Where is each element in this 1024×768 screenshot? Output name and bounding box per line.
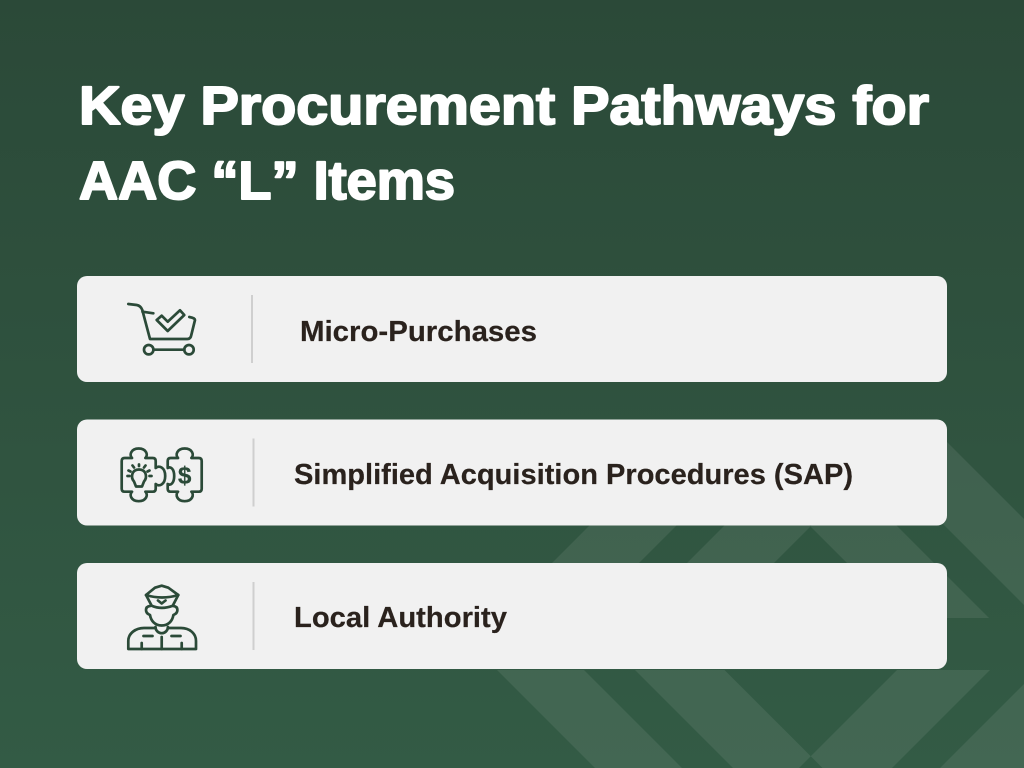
title: AAC “L” Items — [79, 151, 455, 211]
panel: Local Authority — [77, 563, 947, 669]
title — [79, 76, 929, 211]
background chevron pattern — [497, 430, 1024, 768]
icon: puzzle pieces with bulb and dollar — [122, 448, 202, 501]
dollar sign: $ — [178, 462, 192, 490]
icon: shopping cart with check — [128, 304, 195, 354]
panel: Micro-Purchases — [77, 276, 947, 382]
panel: Simplified Acquisition Procedures — [77, 420, 947, 526]
label: Simplified Acquisition Procedures (SAP): Simplified Acquisition Procedures (SAP) — [294, 459, 853, 491]
title: Key Procurement Pathways for — [79, 76, 929, 136]
label: Micro-Purchases: Micro-Purchases — [300, 316, 537, 348]
label: Local Authority: Local Authority — [294, 602, 507, 634]
icon: uniformed officer — [128, 586, 196, 649]
